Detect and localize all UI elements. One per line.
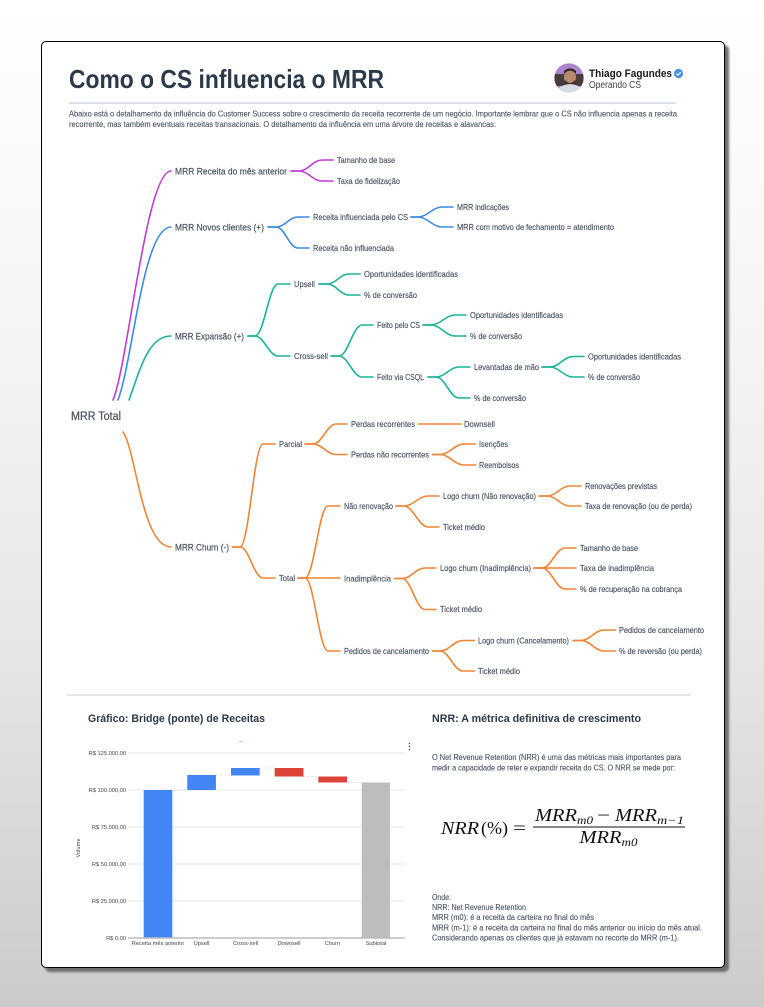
icon: author avatar [554, 63, 584, 93]
connectors: teal branch [129, 274, 584, 400]
NRR definitions: MRR (m0): é a receita da carteira no final do mês [432, 913, 594, 922]
labels: orange branch: Perdas recorrentes [351, 420, 415, 429]
labels: orange branch: % de recuperação na cobrança [580, 585, 682, 594]
branch: MRR Expansão [129, 270, 681, 403]
labels: teal branch: Oportunidades identificadas [588, 352, 681, 362]
labels: teal branch: % de conversão [470, 332, 522, 341]
labels: orange branch: Reembolsos [479, 461, 519, 470]
labels: orange branch: Não renovação [344, 502, 393, 511]
labels: blue branch: Receita influenciada pelo CS [313, 213, 408, 222]
labels: blue branch [175, 203, 614, 253]
x axis labels: Downsell [277, 941, 301, 947]
labels: blue branch: MRR Novos clientes (+) [175, 222, 264, 233]
labels: orange branch: Ticket médio [440, 605, 482, 614]
labels: orange branch: Logo churn (Inadimplência) [440, 564, 531, 573]
bar: Downsell [275, 768, 304, 776]
intro text [69, 110, 677, 129]
labels: orange branch: Pedidos de cancelamento [619, 626, 704, 635]
icon: chart menu dots [409, 743, 410, 750]
labels: orange branch: Downsell [464, 420, 495, 429]
NRR definitions: NRR: Net Revenue Retention [432, 903, 526, 912]
labels: orange branch [175, 420, 704, 676]
NRR formula: m0 [577, 815, 593, 827]
labels: blue branch: MRR com motivo de fechamento = atendimento [457, 223, 614, 232]
labels: purple branch [175, 156, 400, 186]
labels: orange branch: Pedidos de cancelamento [344, 647, 429, 656]
bar chart: revenue bridge [76, 741, 410, 947]
labels: orange branch: Perdas não recorrentes [351, 450, 429, 460]
NRR formula: MRR [534, 805, 577, 825]
labels: orange branch: Isenções [479, 440, 508, 449]
labels: orange branch: Renovações previstas [585, 482, 657, 491]
bar: Receita mês anterior [144, 790, 172, 938]
connectors: orange branch [123, 424, 616, 671]
NRR formula: − [597, 805, 610, 825]
branch: MRR Receita do mês anterior [113, 156, 400, 400]
NRR definitions: MRR (m-1): é a receita da carteira no final do mês anterior ou início do mês atual. [432, 923, 702, 932]
labels: teal branch: % de conversão [588, 373, 640, 382]
y axis labels [89, 751, 126, 942]
x axis labels: Subtotal [366, 941, 386, 947]
labels: teal branch: Feito pelo CS [377, 321, 420, 330]
x axis labels: Churn [325, 941, 340, 947]
bar: Churn [318, 776, 347, 782]
labels: teal branch [175, 270, 681, 403]
mind map root: MRR Total: MRR Total [71, 411, 121, 423]
title: Como o CS influencia o MRR [69, 64, 384, 94]
labels: orange branch: Ticket médio [443, 523, 485, 532]
labels: teal branch: Oportunidades identificadas [470, 311, 563, 320]
labels: purple branch: MRR Receita do mês anterior [175, 166, 288, 177]
NRR description [432, 753, 681, 772]
NRR formula [440, 805, 685, 849]
infographic content [67, 63, 704, 946]
x axis labels: Cross-sell [233, 941, 258, 947]
y axis labels: R$ 50.000,00 [92, 862, 126, 868]
NRR formula: NRR [440, 818, 479, 838]
labels: teal branch: Levantadas de mão [474, 363, 539, 372]
x axis labels [132, 941, 386, 947]
labels: orange branch: Tamanho de base [580, 544, 638, 553]
labels: teal branch: Cross-sell [294, 352, 328, 361]
bar: Subtotal [362, 782, 390, 938]
y axis labels: R$ 0,00 [106, 936, 126, 942]
NRR formula: = [513, 818, 526, 838]
labels: orange branch: Logo churn (Cancelamento) [478, 636, 569, 646]
author subtitle: Operando CS [589, 80, 641, 91]
labels: orange branch: Ticket médio [478, 667, 520, 676]
labels: teal branch: % de conversão [474, 394, 526, 403]
intro text: Abaixo está o detalhamento da influência do Customer Success sobre o crescimento da receita recorrente de um negócio. Importante lembrar que o CS não influencia apenas a receita [69, 110, 677, 118]
NRR definitions: Onde: [432, 893, 451, 902]
labels: orange branch: Inadimplência [344, 574, 391, 584]
y axis labels: R$ 75.000,00 [92, 825, 126, 831]
connectors: blue branch [118, 207, 453, 400]
y axis title: Volume [76, 839, 82, 857]
x axis labels: Receita mês anterior [132, 941, 184, 947]
labels: teal branch: MRR Expansão (+) [175, 331, 244, 342]
labels: purple branch: Tamanho de base [337, 156, 395, 165]
NRR description: O Net Revenue Retention (NRR) é uma das métricas mais importantes para [432, 753, 681, 762]
labels: purple branch: Taxa de fidelização [337, 177, 400, 186]
NRR description: medir a capacidade de reter e expandir receita do CS. O NRR se mede por: [432, 764, 675, 772]
heading: NRR: NRR: A métrica definitiva de crescimento [432, 713, 641, 725]
heading: chart: Gráfico: Bridge (ponte) de Receitas [88, 713, 265, 725]
labels: teal branch: % de conversão [364, 291, 417, 300]
connectors: purple branch [113, 160, 333, 400]
y axis labels: R$ 25.000,00 [92, 899, 126, 905]
branch: MRR Churn [123, 420, 704, 676]
labels: orange branch: % de reversão (ou perda) [619, 647, 702, 656]
author name: Thiago Fagundes [589, 68, 672, 80]
NRR formula: MRR [614, 805, 657, 825]
labels: orange branch: MRR Churn (-) [175, 542, 229, 553]
NRR formula: m0 [622, 837, 638, 849]
bar: Cross-sell [231, 768, 260, 776]
labels: orange branch: Logo churn (Não renovação) [443, 492, 536, 501]
icon: verified check [674, 69, 683, 78]
labels: orange branch: Taxa de inadimplência [580, 564, 654, 573]
author badge [554, 63, 683, 93]
labels: orange branch: Parcial [279, 440, 302, 449]
labels: blue branch: MRR indicações [457, 203, 509, 212]
labels: blue branch: Receita não influenciada [313, 244, 394, 253]
labels: orange branch: Taxa de renovação (ou de perda) [585, 502, 692, 511]
bar: Upsell [187, 775, 216, 790]
labels: teal branch: Upsell [294, 280, 315, 289]
branch: MRR Novos clientes [118, 203, 614, 400]
NRR definitions [432, 893, 702, 943]
NRR formula: (%) [481, 818, 508, 839]
labels: teal branch: Oportunidades identificadas [364, 270, 458, 279]
y axis labels: R$ 125.000,00 [89, 751, 126, 757]
labels: teal branch: Feito via CSQL [377, 373, 424, 382]
x axis labels: Upsell [194, 941, 209, 947]
NRR formula: m−1 [657, 815, 684, 827]
labels: orange branch: Total [279, 574, 295, 583]
y axis labels: R$ 100.000,00 [89, 788, 126, 794]
NRR formula: MRR [578, 827, 622, 847]
NRR definitions: Considerando apenas os clientes que já estavam no recorte do MRR (m-1). [432, 934, 679, 943]
intro text: recorrente, mas também eventuais receitas transacionais. O detalhamento da influência em uma árvore de receitas e alavancas: [69, 120, 496, 129]
